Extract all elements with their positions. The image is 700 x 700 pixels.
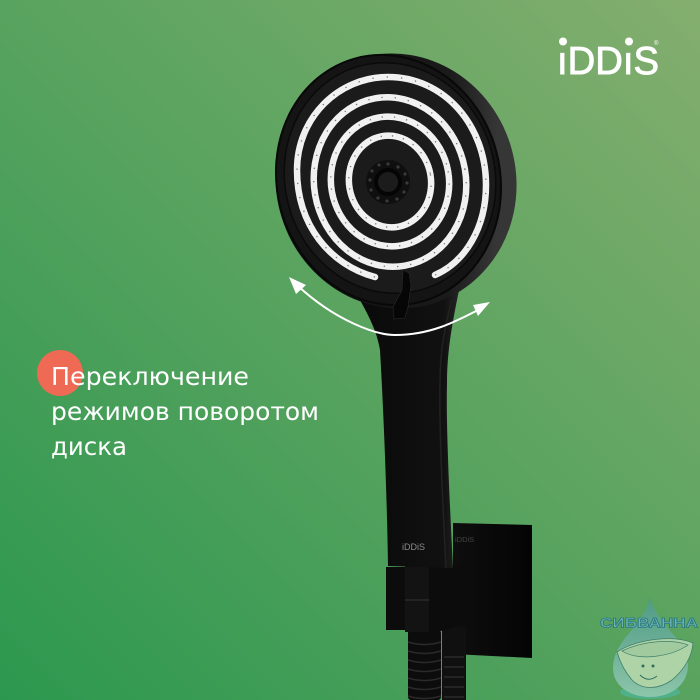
ring 3 nozzles: [300, 85, 480, 279]
center nozzle: [366, 160, 410, 204]
wall plate brand mark: iDDiS: [455, 535, 474, 544]
caption text: диска: [51, 432, 127, 461]
spray ring 2: [321, 107, 459, 256]
handle: [352, 285, 460, 568]
spray ring 1: [342, 129, 438, 234]
ring 1 nozzles: [342, 129, 438, 234]
rotation arrow: [289, 277, 490, 335]
shower head and handle: [247, 26, 545, 568]
switch lever: [393, 270, 411, 319]
puddle: [620, 685, 680, 699]
caption text: Переключение: [51, 362, 249, 391]
water drop: [613, 597, 688, 697]
left arrowhead: [289, 277, 306, 294]
second hose: [442, 626, 466, 700]
head rim: [247, 26, 545, 336]
brand text: СИБВАННА: [600, 616, 698, 630]
head face: [248, 29, 529, 331]
holder neck: [405, 566, 429, 632]
logo: iDDiS: ®: [654, 40, 659, 47]
bathtub inner rim: [622, 641, 688, 657]
ring 2 nozzles: [321, 107, 459, 256]
main hose: [408, 630, 441, 700]
handle brand mark: iDDiS: [402, 542, 425, 552]
caption text: режимов поворотом: [51, 397, 319, 426]
outer spray ring: [297, 77, 486, 277]
bathtub face: [640, 664, 657, 679]
right arrowhead: [473, 302, 490, 316]
watermark: Sibvanna logo: [600, 597, 698, 699]
wall plate: [453, 523, 532, 658]
holder bracket: [386, 562, 475, 634]
outer ring nozzles: [297, 77, 486, 277]
red accent circle: [37, 350, 83, 396]
bathtub: [617, 639, 693, 688]
handle edge highlight: [440, 300, 452, 568]
spray ring 3: [300, 85, 480, 279]
logo: iDDiS: ıDDıS: [557, 40, 659, 83]
caption text: [51, 362, 319, 461]
inner face groove: [259, 39, 521, 317]
wall holder: [386, 523, 532, 700]
